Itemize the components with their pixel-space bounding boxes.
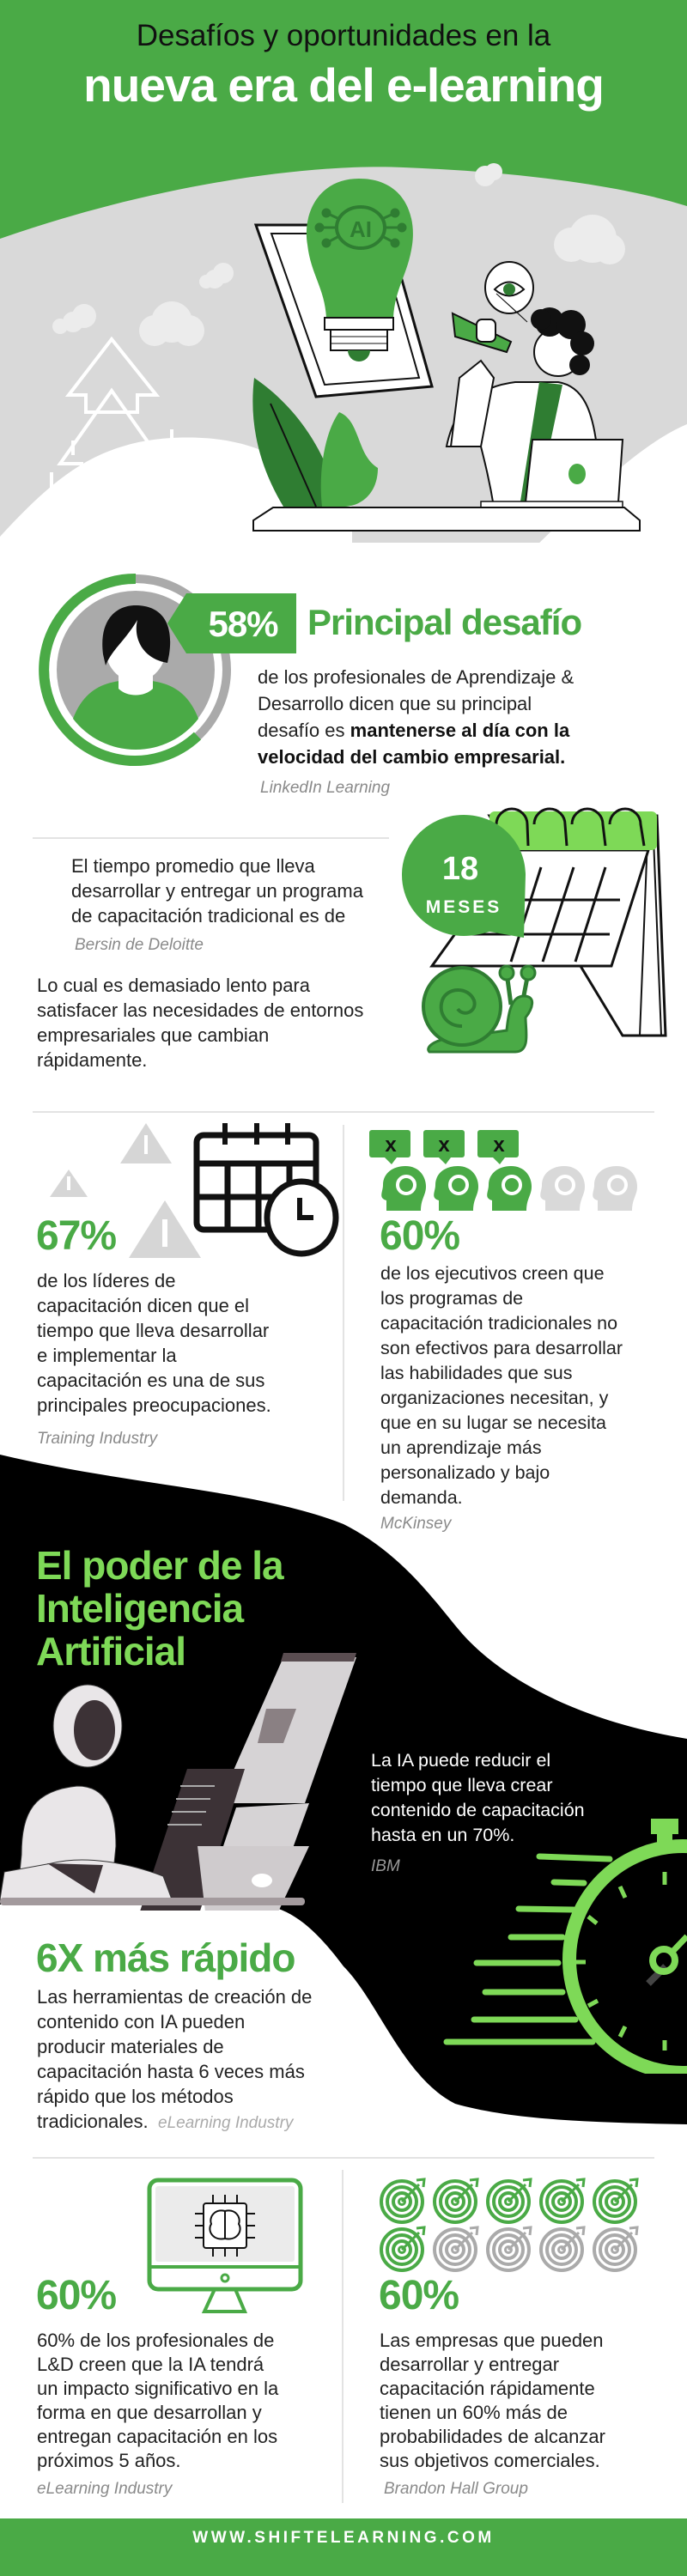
icon: calendar with snail and 18 meses bubble [402,807,667,1053]
icon: heads with x bubbles: x [438,1133,450,1157]
text block: IBM stat: hasta en un 70%. [371,1825,514,1845]
text block: de los ejecutivos creen que [380,1263,605,1284]
hero illustration: AI [350,216,372,242]
text block [71,855,363,927]
icon: stopwatch [443,1819,687,2074]
panel: 18 meses [37,807,667,1071]
text block: personalizado y bajo [380,1462,550,1483]
text block: Las herramientas de creación de [37,1986,312,2008]
title: nueva era del e-learning [83,58,604,112]
text block: de los líderes de [37,1270,175,1291]
laptop [526,440,623,502]
text block: organizaciones necesitan, y [380,1388,608,1408]
icon: heads with x bubbles: x [493,1133,505,1157]
58% tag [167,593,296,653]
panel: 6X más rápido [36,1935,312,2132]
clouds [52,163,625,346]
source: IBM [371,1857,400,1875]
text block [37,1986,312,2132]
text block: empresariales que cambian [37,1024,269,1046]
text block [37,2330,278,2471]
60% figure: 60% [36,2273,116,2318]
text block: tiempo que lleva desarrollar [37,1320,269,1341]
tablet [256,225,432,397]
text block: un aprendizaje más [380,1437,542,1458]
text block: de los profesionales de Aprendizaje & [258,666,574,688]
text block: IBM stat [371,1750,585,1875]
text block: demanda. [380,1487,463,1508]
plant [252,378,339,507]
text block: capacitación rápidamente [380,2378,595,2399]
text block: tradicionales. eLearning Industry [37,2111,293,2132]
source: Bersin de Deloitte [75,936,204,954]
text block: los programas de [380,1288,523,1309]
text block: desafío es mantenerse al día con la [258,720,569,741]
icon: heads with x bubbles [369,1130,637,1211]
heading: El poder de la Inteligencia Artificial: Artificial [36,1629,185,1674]
panel: 58% principal desafío [39,574,581,797]
footer: WWW.SHIFTELEARNING.COM [192,2529,495,2547]
text block: desarrollar y entregar un programa [71,880,363,902]
heading: El poder de la Inteligencia Artificial: El poder de la [36,1543,283,1588]
text block: velocidad del cambio empresarial. [258,746,565,768]
text block: e implementar la [37,1345,177,1366]
icon: heads with x bubbles: x [385,1133,397,1157]
text block: rápido que los métodos [37,2086,234,2107]
hero illustration [50,163,641,532]
text block: Lo cual es demasiado lento para [37,975,310,996]
text block: Las empresas que pueden [380,2330,604,2351]
snail [507,973,511,1005]
text block [37,975,363,1071]
heading: 6X más rápido [36,1935,295,1980]
panel: 67% líderes [36,1123,338,1448]
text block: desarrollar y entregar [380,2354,559,2375]
text block: capacitación hasta 6 veces más [37,2061,305,2082]
text block: que en su lugar se necesita [380,1413,606,1433]
footer [0,2518,687,2576]
text block: Desarrollo dicen que su principal [258,693,532,714]
icon: monitor with AI chip [148,2178,302,2313]
text block: de capacitación tradicional es de [71,905,345,927]
text block: rápidamente. [37,1049,147,1071]
illustration: robot with documents [0,1653,356,1911]
text block: tienen un 60% más de [380,2402,568,2423]
icon: targets grid [380,2178,639,2272]
text block: IBM stat: tiempo que lleva crear [371,1775,553,1795]
text block [37,1270,271,1416]
source: Brandon Hall Group [384,2480,528,2498]
text block: un impacto significativo en la [37,2378,278,2399]
panel: 60% L&D IA impacto [36,2178,302,2498]
text block [380,1263,623,1508]
person [447,382,597,507]
text block: probabilidades de alcanzar [380,2426,605,2447]
source: McKinsey [380,1515,451,1533]
text block: IBM stat: La IA puede reducir el [371,1750,550,1771]
60% figure: 60% [380,1213,459,1259]
arrows [52,339,172,507]
text block: producir materiales de [37,2036,224,2057]
source: LinkedIn Learning [260,779,390,797]
text block: capacitación dicen que el [37,1295,249,1316]
58% tag: 58% [208,604,278,644]
source: eLearning Industry [37,2480,172,2498]
speech bubble eye [485,262,533,313]
text block: satisfacer las necesidades de entornos [37,999,363,1021]
source: Training Industry [37,1430,157,1448]
text block: son efectivos para desarrollar [380,1338,623,1358]
text block [380,2330,605,2471]
text block: El tiempo promedio que lleva [71,855,315,877]
text block: IBM stat: contenido de capacitación [371,1800,585,1820]
text block: 60% de los profesionales de [37,2330,274,2351]
text block: entregan capacitación en los [37,2426,277,2447]
text block: L&D creen que la IA tendrá [37,2354,264,2375]
text block: forma en que desarrollan y [37,2402,262,2423]
text block: capacitación tradicionales no [380,1313,617,1334]
text block: principales preocupaciones. [37,1394,271,1416]
title: Desafíos y oportunidades en la [137,19,550,52]
desk [253,507,640,531]
icon: warnings and calendar clock [50,1123,338,1258]
text block: sus objetivos comerciales. [380,2450,600,2471]
60% figure: 60% [379,2273,459,2318]
icon: woman avatar ring [39,574,231,766]
text block: las habilidades que sus [380,1363,573,1383]
text block: contenido con IA pueden [37,2011,245,2032]
text block: próximos 5 años. [37,2450,181,2471]
text block [258,666,574,768]
heading: Principal desafío [307,602,581,642]
67% figure: 67% [36,1213,116,1259]
icon: calendar with snail and 18 meses bubble: MESES [426,897,502,917]
panel: 60% empresas [379,2178,639,2498]
bulb [307,179,413,318]
heading: El poder de la Inteligencia Artificial: Inteligencia [36,1586,243,1631]
title [83,19,604,112]
heading: El poder de la Inteligencia Artificial [36,1543,284,1674]
icon: calendar with snail and 18 meses bubble: 18 [442,851,478,887]
text block: capacitación es una de sus [37,1370,264,1391]
panel: 60% ejecutivos [369,1130,637,1533]
